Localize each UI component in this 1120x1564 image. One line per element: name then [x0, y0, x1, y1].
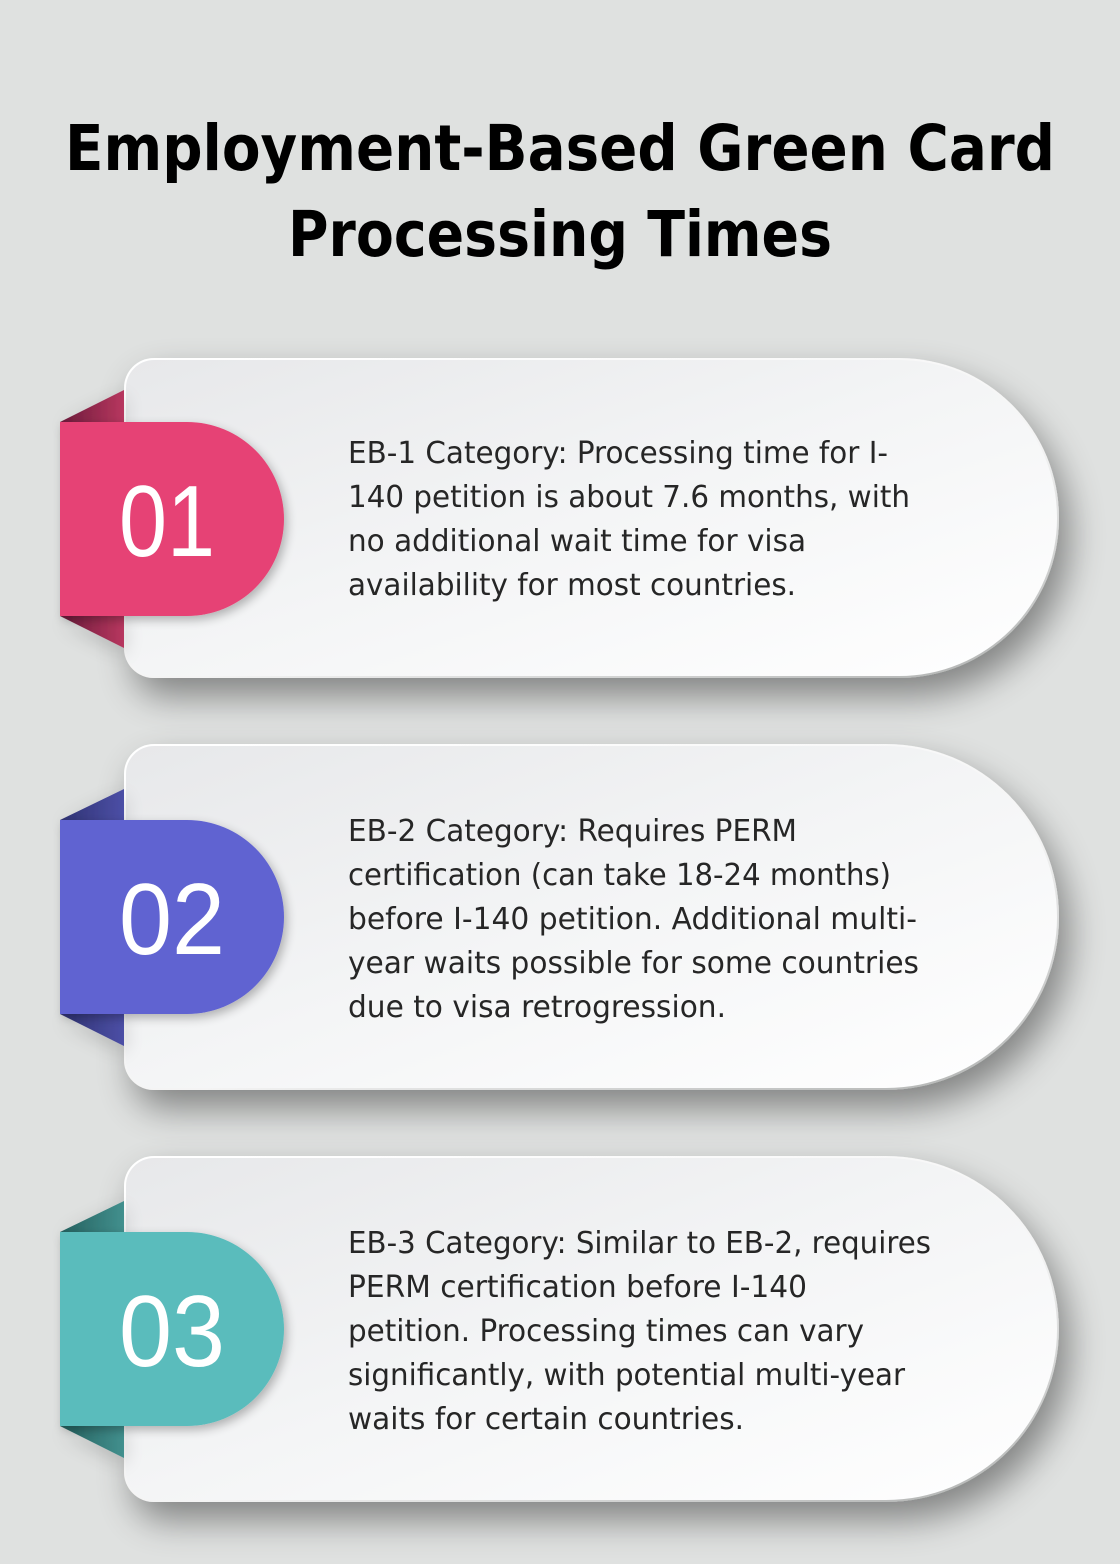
description text [348, 436, 910, 603]
description text: EB-1 Category: Processing time for I- [348, 436, 888, 471]
title [65, 111, 1055, 271]
ribbon folds [60, 390, 124, 648]
card background [124, 744, 1059, 1090]
description text: due to visa retrogression. [348, 990, 726, 1025]
description text: EB-2 Category: Requires PERM [348, 814, 797, 849]
description text [348, 1226, 931, 1437]
description text: 140 petition is about 7.6 months, with [348, 480, 910, 515]
title: Processing Times [288, 197, 832, 271]
panel: EB-2 step [60, 744, 1059, 1090]
number badge [60, 1232, 284, 1426]
number badge: 03 [119, 1276, 225, 1388]
number badge [60, 422, 284, 616]
description text: petition. Processing times can vary [348, 1314, 864, 1349]
description text: PERM certification before I-140 [348, 1270, 807, 1305]
panel: EB-1 step [60, 358, 1059, 678]
description text [348, 814, 919, 1025]
description text: significantly, with potential multi-year [348, 1358, 906, 1393]
description text: waits for certain countries. [348, 1402, 744, 1437]
ribbon folds [60, 1201, 124, 1458]
description text: year waits possible for some countries [348, 946, 919, 981]
number badge: 01 [119, 466, 215, 578]
number badge: 02 [119, 864, 225, 976]
card background [124, 358, 1059, 678]
panel: EB-3 step [60, 1156, 1059, 1502]
description text: before I-140 petition. Additional multi- [348, 902, 917, 937]
description text: availability for most countries. [348, 568, 796, 603]
card background [124, 1156, 1059, 1502]
number badge [60, 820, 284, 1014]
ribbon folds [60, 789, 124, 1046]
description text: EB-3 Category: Similar to EB-2, requires [348, 1226, 931, 1261]
description text: certification (can take 18-24 months) [348, 858, 891, 893]
description text: no additional wait time for visa [348, 524, 806, 559]
